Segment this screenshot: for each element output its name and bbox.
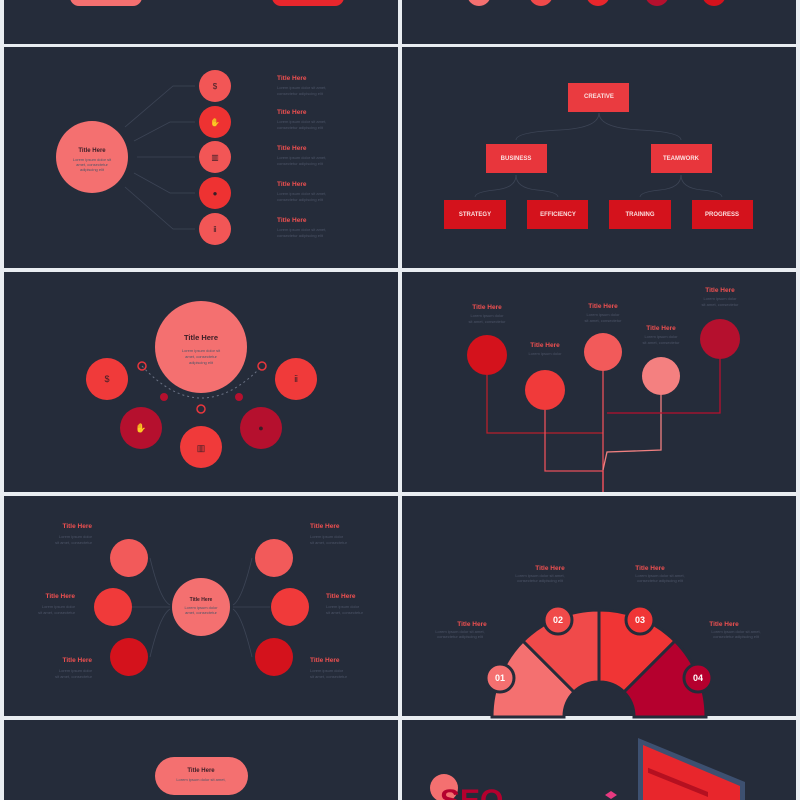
panel: hub with five items: consectetur adipiscing elit	[277, 197, 324, 202]
panel: six around center: Title Here	[62, 657, 92, 664]
panel: six around center: Lorem ipsum dolor	[184, 605, 218, 610]
panel: org chart	[402, 47, 796, 268]
panel: hub with five items: Lorem ipsum dolor sit amet,	[277, 85, 326, 90]
panel: six around center: Lorem ipsum dolor	[310, 668, 344, 673]
panel: six around center: Lorem ipsum dolor	[59, 668, 93, 673]
panel: tree: sit amet, consectetur	[585, 318, 622, 323]
panel: hub with five items: ✋	[210, 117, 220, 127]
panel: hub with five items: consectetur adipiscing elit	[277, 233, 324, 238]
panel: arc of bubbles: Title Here	[184, 333, 218, 342]
panel: semicircle steps: 04	[693, 673, 703, 683]
panel: tree: Title Here	[588, 303, 618, 310]
panel: semicircle steps: Lorem ipsum dolor sit amet,	[635, 573, 685, 578]
panel: tree: Lorem ipsum dolor	[528, 351, 562, 356]
panel: hub with five items: Title Here	[277, 109, 307, 116]
panel: org chart: TEAMWORK	[663, 156, 700, 162]
panel: semicircle steps: 02	[553, 615, 563, 625]
panel: org chart: PROGRESS	[705, 212, 739, 218]
panel: arc of bubbles: ⅱ	[294, 374, 298, 384]
panel: semicircle steps: consectetur adipiscing elit	[437, 634, 484, 639]
panel: six around center: Title Here	[62, 523, 92, 530]
panel: six around center: sit amet, consectetur	[310, 540, 348, 545]
panel: hub with five items: Lorem ipsum dolor sit amet,	[277, 191, 326, 196]
panel: six around center: Lorem ipsum dolor	[326, 604, 360, 609]
panel: semicircle steps: Lorem ipsum dolor sit amet,	[515, 573, 565, 578]
panel: tree: Title Here	[705, 287, 735, 294]
panel: arc of bubbles: $	[104, 374, 110, 384]
panel: semicircle steps: 03	[635, 615, 645, 625]
panel: bottom left pill: Title Here	[187, 768, 215, 774]
panel: org chart: BUSINESS	[501, 156, 531, 162]
panel: six around center: sit amet, consectetur	[38, 610, 76, 615]
panel: semicircle steps	[402, 496, 796, 717]
panel: bottom left pill: Lorem ipsum dolor sit amet,	[176, 777, 226, 782]
panel: semicircle steps: consectetur adipiscing elit	[637, 578, 684, 583]
panel: six around center: Title Here	[190, 597, 213, 603]
panel: six around center: sit amet, consectetur	[55, 674, 93, 679]
panel: six around center: Lorem ipsum dolor	[59, 534, 93, 539]
panel: hub with five items: consectetur adipiscing elit	[277, 161, 324, 166]
panel: hub with five items: ●	[213, 189, 218, 198]
panel: arc of bubbles: ▥	[197, 443, 205, 453]
panel: semicircle steps: 01	[495, 673, 505, 683]
panel: org chart: CREATIVE	[584, 94, 614, 100]
panel: org chart: TRAINING	[626, 212, 655, 218]
panel: six around center: Title Here	[326, 593, 356, 600]
panel: tree: Lorem ipsum dolor	[644, 334, 678, 339]
panel: semicircle steps: Lorem ipsum dolor sit amet,	[435, 629, 485, 634]
panel: six around center: Lorem ipsum dolor	[42, 604, 76, 609]
panel: org chart: EFFICIENCY	[540, 212, 576, 218]
panel: six around center	[4, 496, 398, 716]
panel: six around center: Lorem ipsum dolor	[310, 534, 344, 539]
panel: tree: Title Here	[530, 342, 560, 349]
panel: bottom left pill	[4, 720, 398, 800]
panel: tree: sit amet, consectetur	[643, 340, 680, 345]
panel: hub with five items: Lorem ipsum dolor sit amet,	[277, 227, 326, 232]
panel: hub with five items: Title Here	[78, 148, 106, 154]
panel: arc of bubbles: Lorem ipsum dolor sit	[182, 348, 221, 353]
panel: semicircle steps: Title Here	[535, 565, 565, 572]
panel: arc of bubbles: ✋	[135, 422, 147, 433]
panel: hub with five items: consectetur adipiscing elit	[277, 125, 324, 130]
panel: semicircle steps: Lorem ipsum dolor sit amet,	[711, 629, 761, 634]
panel: hub with five items: Title Here	[277, 75, 307, 82]
panel: hub with five items: Title Here	[277, 145, 307, 152]
panel: tree	[402, 272, 796, 492]
panel: hub with five items: amet, consectetur	[76, 162, 109, 167]
panel: arc of bubbles	[4, 272, 398, 492]
panel: hub with five items: ⅱ	[213, 225, 217, 234]
panel: hub with five items: Lorem ipsum dolor sit amet,	[277, 119, 326, 124]
panel: hub with five items: Title Here	[277, 181, 307, 188]
panel: hub with five items: adipiscing elit	[80, 167, 105, 172]
panel: hub with five items: consectetur adipiscing elit	[277, 91, 324, 96]
panel: semicircle steps: Title Here	[635, 565, 665, 572]
panel: tree: Lorem ipsum dolor	[703, 296, 737, 301]
panel: six around center: sit amet, consectetur	[326, 610, 364, 615]
panel: hub with five items: Lorem ipsum dolor sit amet,	[277, 155, 326, 160]
panel: tree: Title Here	[646, 325, 676, 332]
panel: six around center: sit amet, consectetur	[310, 674, 348, 679]
panel: six around center: Title Here	[45, 593, 75, 600]
panel: hub with five items: ▥	[211, 153, 219, 162]
panel: semicircle steps: Title Here	[709, 621, 739, 628]
panel: tree: Lorem ipsum dolor	[586, 312, 620, 317]
panel: six around center: sit amet, consectetur	[55, 540, 93, 545]
panel: tree: Title Here	[472, 304, 502, 311]
panel: semicircle steps: consectetur adipiscing elit	[713, 634, 760, 639]
panel: arc of bubbles: adipiscing elit	[189, 360, 214, 365]
panel: arc of bubbles: ●	[258, 423, 264, 433]
panel: hub with five items	[4, 47, 398, 268]
panel: org chart: STRATEGY	[459, 212, 491, 218]
panel: semicircle steps: consectetur adipiscing elit	[517, 578, 564, 583]
panel: tree: sit amet, consectetur	[702, 302, 739, 307]
panel: tree: sit amet, consectetur	[469, 319, 506, 324]
panel: six around center: Title Here	[310, 523, 340, 530]
panel: hub with five items: Lorem ipsum dolor sit	[73, 157, 112, 162]
panel: top right partial	[402, 0, 796, 44]
panel: six around center: Title Here	[310, 657, 340, 664]
panel: bottom right SEO laptop	[402, 720, 796, 800]
panel: top left partial	[4, 0, 398, 44]
panel: six around center: amet, consectetur	[185, 610, 218, 615]
panel: hub with five items: $	[213, 82, 218, 91]
panel: tree: Lorem ipsum dolor	[470, 313, 504, 318]
panel: arc of bubbles: amet, consectetur	[185, 354, 218, 359]
panel: semicircle steps: Title Here	[457, 621, 487, 628]
panel: hub with five items: Title Here	[277, 217, 307, 224]
